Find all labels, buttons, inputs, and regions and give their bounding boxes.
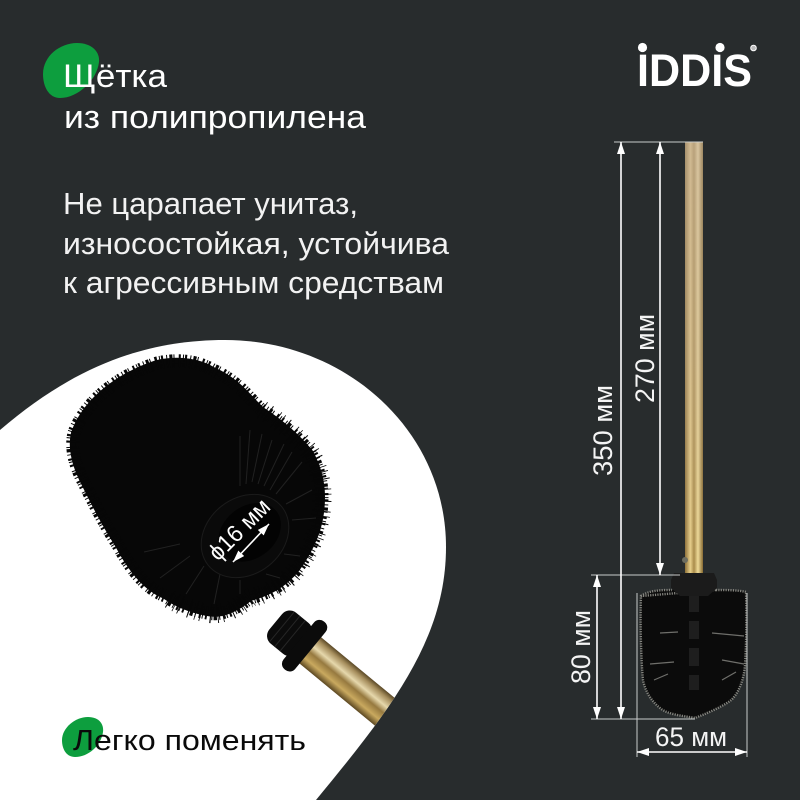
description text: к агрессивным средствам (63, 265, 444, 300)
dimension arrow: 270 mm (659, 142, 661, 575)
rod (300, 637, 394, 726)
caption: Легко поменять (73, 725, 306, 757)
logo: IDDIS: IDDIS (637, 45, 752, 96)
dimension arrow: 350 mm (620, 142, 622, 719)
brush mounting ring (185, 477, 305, 595)
green accent blob: caption (62, 717, 103, 757)
dimension lines (591, 142, 747, 757)
diameter label: ϕ16 мм (203, 493, 276, 566)
heading (63, 58, 366, 135)
dimension arrow: 80 mm (596, 575, 598, 719)
green accent blob: heading (43, 43, 99, 98)
white blob panel (0, 340, 446, 800)
thread (267, 610, 311, 656)
brush socket (671, 573, 717, 596)
heading: Щётка (63, 58, 167, 94)
bristle highlights (144, 430, 316, 604)
description text: Не царапает унитаз, (63, 186, 358, 221)
heading: из полипропилена (64, 99, 366, 135)
label: 65 mm: 65 мм (655, 722, 727, 752)
label: 80 mm: 80 мм (566, 610, 596, 684)
large brush head (73, 361, 322, 614)
collar (282, 620, 328, 672)
label: 350 mm: 350 мм (588, 385, 618, 476)
description text: износостойкая, устойчива (63, 226, 450, 261)
small product brush (641, 573, 746, 718)
dimension arrow: 65 mm (637, 751, 747, 753)
large rod with threaded end (267, 610, 394, 726)
bristle fringe (641, 590, 746, 718)
label: 270 mm: 270 мм (630, 314, 660, 403)
description text (63, 186, 450, 300)
product rod (682, 142, 703, 574)
bristle fringe (73, 361, 322, 614)
diameter arrow (233, 524, 269, 562)
